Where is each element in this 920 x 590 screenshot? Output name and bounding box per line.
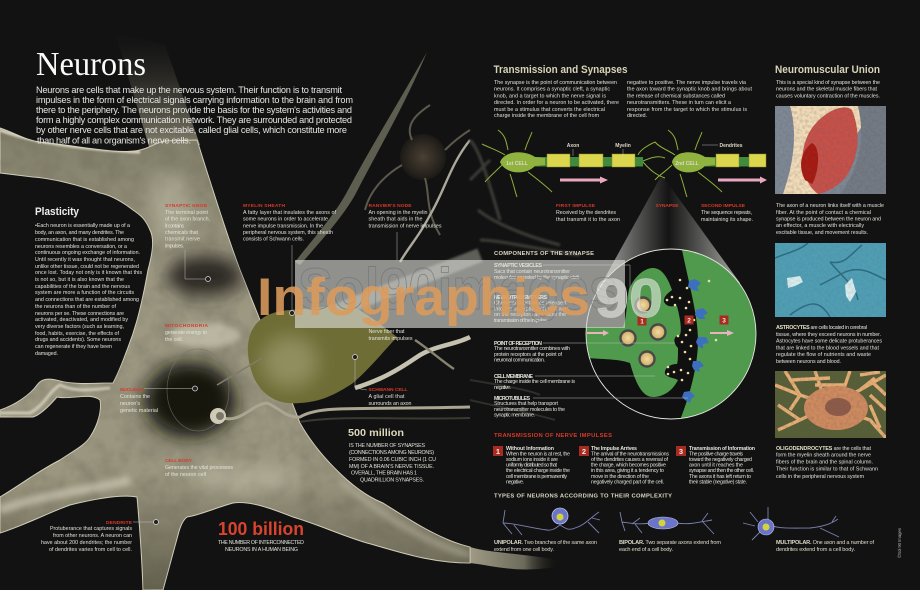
watermark: Sol90images xyxy=(298,257,618,322)
label: synaptic knob: The terminal point xyxy=(165,210,209,216)
label: Ranvier's node: An opening in the myelin xyxy=(368,210,428,216)
step 1: uniformly distributed so that xyxy=(506,462,558,468)
stat: 100 billion xyxy=(218,519,304,553)
text: Plasticity: Until recently it was thought that neurons, xyxy=(35,257,135,263)
label: synaptic knob: chemicals that xyxy=(165,230,199,236)
label: mitochondria: MITOCHONDRIA xyxy=(165,323,208,329)
diagram: two connected cells: 1st CELL xyxy=(506,161,528,167)
text: Plasticity: damaged. xyxy=(35,351,58,357)
label: components text: SYNAPTIC VESICLES xyxy=(494,263,542,269)
captions: neuron types: each end of a cell body. xyxy=(619,547,673,553)
captions: neuron types: MULTIPOLAR. One axon and a number of xyxy=(776,540,874,546)
label: myelin sheath: some neurons in order to accelerate xyxy=(243,217,328,223)
text: transmission intro: knob, and a target to which the nerve signal is xyxy=(494,94,606,100)
text: Plasticity: Plasticity xyxy=(35,206,80,218)
label: cell body xyxy=(165,458,233,478)
text: Plasticity: the neurons than of the number of xyxy=(35,304,117,310)
label: components text: on the receptors and allow the xyxy=(494,312,566,318)
label: myelin sheath: peripheral nervous system, this sheath xyxy=(243,230,333,236)
text: Plasticity: can regenerate if they have been xyxy=(35,344,112,350)
text: transmission intro: must be a stimulus that converts the electrical xyxy=(494,107,605,113)
icon: unipolar neuron xyxy=(503,508,600,535)
text: transmission intro: directed. In order for a neuron to be activated, there xyxy=(494,100,619,106)
text: Plasticity: •Each neuron is essentially made up of a xyxy=(35,223,130,229)
text: astrocytes: between neurons and blood. xyxy=(776,359,841,365)
text: transmission intro: the axon toward the synaptic knob and brings about xyxy=(627,87,753,93)
label: first impulse: FIRST IMPULSE xyxy=(556,203,596,209)
step 3: their stable (negative) state. xyxy=(689,480,747,486)
post-synaptic cell xyxy=(680,250,756,418)
label: synaptic knob: transmit nerve xyxy=(165,237,200,243)
label: first impulse: Received by the dendrites xyxy=(556,210,616,216)
label: components text: The neurotransmitter combines with xyxy=(494,346,570,352)
text: Plasticity: and connections that are established among xyxy=(35,297,139,303)
text: transmission intro: negative to positive. The nerve impulse travels via xyxy=(627,80,746,86)
receptors xyxy=(682,279,709,403)
label: mitochondria xyxy=(165,323,208,343)
text: transmission intro: response from the target to which the stimulus is xyxy=(627,107,747,113)
label: second impulse xyxy=(701,203,753,223)
intro text: form a highly complex communication network. They are surrounded and protected xyxy=(36,115,352,125)
icon: bipolar neuron xyxy=(620,512,714,534)
label: synaptic knob xyxy=(165,203,210,282)
credit: ©Sol 90 Images xyxy=(896,527,902,558)
step 1: Without Information xyxy=(506,446,554,452)
label: Ranvier's node xyxy=(368,203,442,260)
label: synaptic knob: it contains xyxy=(165,224,184,230)
synaptic knob xyxy=(580,268,681,397)
label: second impulse: maintaining its shape. xyxy=(701,217,753,223)
label: synaptic knob: impulses. xyxy=(165,244,184,250)
label: myelin sheath: MYELIN SHEATH xyxy=(243,203,285,209)
label: myelin sheath xyxy=(243,203,337,316)
step 2: 2 xyxy=(582,447,586,456)
step 1: 1 xyxy=(496,447,500,456)
text: transmission intro: neurotransmitters. These in turn can elicit a xyxy=(627,100,731,106)
text: transmission intro: directed. xyxy=(627,113,647,119)
stat: 500 million: FORMED IN 0.06 CUBIC INCH (1 CU xyxy=(349,457,436,463)
watermark: 90 xyxy=(595,267,663,329)
label: myelin sheath: consists of Schwann cells. xyxy=(243,237,304,243)
heading: neuromuscular union: Neuromuscular Union xyxy=(775,64,880,76)
text: astrocytes: regulate the flow of nutrients and waste xyxy=(776,352,871,358)
step 3: The positive charge travels xyxy=(689,452,743,458)
step 1: cell membrane is permanently xyxy=(506,474,567,480)
label: cell body: CELL BODY xyxy=(165,458,193,464)
label: myelin sheath: A fatty layer that insulates the axons of xyxy=(243,210,337,216)
label: Schwann cell: SCHWANN CELL xyxy=(368,387,408,393)
text: astrocytes: ASTROCYTES are cells located in cerebral xyxy=(776,325,867,331)
label: cell body: of the neuron cell xyxy=(165,472,206,478)
diagram: two connected cells: Axon xyxy=(567,143,579,149)
text: oligodendrocytes: cells in the peripheral nervous system xyxy=(776,474,865,480)
text: Plasticity: neurons resembles a conversation, or a xyxy=(35,244,127,250)
label: Ranvier's node: RANVIER'S NODE xyxy=(368,203,412,209)
text: Plasticity: activated, deactivated, and modified by xyxy=(35,317,128,323)
text: Plasticity: is not so, but it is also known that the xyxy=(35,277,124,283)
stat: 100 billion: NEURONS IN A HUMAN BEING xyxy=(225,547,298,553)
step 2: of the dendrites causes a reversal of xyxy=(591,457,669,463)
text: neuron and muscle: synapse is produced between the neuron and xyxy=(776,216,881,222)
intro text xyxy=(36,85,353,146)
flow arrows xyxy=(587,330,609,336)
text: neuromuscular intro xyxy=(776,80,880,100)
text: Plasticity: body, an axon, and many dendrites. The xyxy=(35,230,124,236)
step 3: 3 xyxy=(679,447,683,456)
label: axon xyxy=(368,329,413,342)
step 2: in this area, giving it a tendency to xyxy=(591,468,664,474)
stat: 100 billion: THE NUMBER OF INTERCONNECTED xyxy=(218,540,304,546)
text: Plasticity: drugs and accidents). Some neurons xyxy=(35,337,121,343)
diagram: two connected cells: Myelin xyxy=(615,143,631,149)
neurotransmitter dots xyxy=(666,279,717,381)
label: axon: Nerve fiber that xyxy=(368,329,405,335)
text: oligodendrocytes: Their function is similar to that of Schwann xyxy=(776,466,878,472)
heading: components of the synapse: COMPONENTS OF THE SYNAPSE xyxy=(494,251,594,257)
label: dendrite: have about 200 dendrites; the number xyxy=(41,540,132,546)
label: myelin sheath: nerve impulse transmission. In the xyxy=(243,224,323,230)
text: transmission intro xyxy=(494,80,753,119)
step 2: negatively charged part of the cell. xyxy=(591,480,664,486)
text: transmission intro: charge inside the membrane of the cell from xyxy=(494,113,600,119)
label: dendrite: DENDRITE xyxy=(106,520,133,526)
text: neuromuscular intro: This is a special kind of synapse between the xyxy=(776,80,880,86)
text: neuron and muscle: fiber. At the point of contact a chemical xyxy=(776,210,871,216)
intro text: impulses in the form of electrical signals carrying information to the brain and from xyxy=(36,95,353,105)
diagram: two connected cells: Dendrites xyxy=(719,143,743,149)
step 1: the electrical charge inside the xyxy=(506,468,570,474)
text: Plasticity: neurons per se. These connections are xyxy=(35,311,124,317)
number badges: 2 xyxy=(687,317,691,324)
text: neuron and muscle: an effector, a muscle with electrically xyxy=(776,223,864,229)
stat: 500 million: MM) OF A BRAIN'S NERVE TISSUE. xyxy=(349,464,434,470)
text: neuromuscular intro: causes voluntary contraction of the muscles. xyxy=(776,94,880,100)
label: dendrite: of dendrites varies from cell to cell. xyxy=(49,547,132,553)
label: cell body: Generates the vital processes xyxy=(165,465,233,471)
captions: neuron types: BIPOLAR. Two separate axons extend from xyxy=(619,540,721,546)
label: components text: molecules secreted by the synaptic cleft xyxy=(494,275,580,281)
step 2: move in the direction of the xyxy=(591,474,649,480)
label: first impulse xyxy=(556,203,620,223)
step 2: The arrival of the neurotransmissions xyxy=(591,452,669,458)
label: nucleus: genetic material xyxy=(120,408,158,414)
photo: oligodendrocytes xyxy=(775,371,886,438)
illustration: olive Schwann cell xyxy=(248,305,397,403)
illustration: axon fibres xyxy=(210,337,470,424)
label: Ranvier's node: sheath that aids in the xyxy=(368,217,423,223)
step 3: Transmission of Information xyxy=(689,446,755,452)
stat: 100 billion: 100 billion xyxy=(218,519,304,539)
label: components text: neurotransmitter molecules to the xyxy=(494,407,565,413)
illustration: background neuron and fibres xyxy=(295,52,580,420)
step 1: When the neuron is at rest, the xyxy=(506,452,570,458)
step 2: the charge, which becomes positive xyxy=(591,462,666,468)
label: nucleus: NUCLEUS xyxy=(120,387,144,393)
text: transmission intro: neurons. It comprises a synaptic cleft, a synaptic xyxy=(494,87,610,93)
text: Plasticity: very diverse factors (such as learning, xyxy=(35,324,124,330)
step 2: The Impulse Arrives xyxy=(591,446,637,452)
text: oligodendrocytes: fibers of the brain and the spinal column. xyxy=(776,460,873,466)
nucleus outline xyxy=(167,349,229,431)
label: components text: negative. xyxy=(494,385,511,391)
text: transmission intro: The synapse is the point of communication between xyxy=(494,80,617,86)
number badges xyxy=(638,316,728,326)
label: Schwann cell: surrounds an axon xyxy=(368,401,412,407)
label: components text: NEUROTRANSMITTERS xyxy=(494,295,547,301)
title: Neurons xyxy=(36,46,146,83)
diagram: two connected cells xyxy=(482,130,767,334)
label: components text: synaptic membrane. xyxy=(494,412,535,418)
text: astrocytes xyxy=(776,325,882,365)
icon: multipolar neuron xyxy=(743,507,839,540)
text: oligodendrocytes xyxy=(776,446,878,480)
label: dendrite: Protuberance that captures signals xyxy=(50,526,132,532)
label: nucleus: Contains the xyxy=(120,394,150,400)
label: Schwann cell: A glial cell that xyxy=(368,394,405,400)
text: transmission intro: the release of chemical substances called xyxy=(627,94,725,100)
intro text: there to the periphery. The neurons provide the basis for the system's activities and xyxy=(36,105,352,115)
heading: transmission and synapses: Transmission and Synapses xyxy=(494,64,628,76)
intro text: by other nerve cells that are not excitable, called glial cells, which constitute more xyxy=(36,125,347,135)
label: mitochondria: the cell. xyxy=(165,337,183,343)
label: components text: Chemical substances released xyxy=(494,300,566,306)
text: Plasticity: once lost. Today not only is it known that this xyxy=(35,270,142,276)
text: astrocytes: that are linked to the blood vessels and that xyxy=(776,346,880,352)
captions: neuron types xyxy=(494,540,874,553)
text: neuron and muscle: excitable tissue, and movement results. xyxy=(776,230,868,236)
stat: 500 million: 500 million xyxy=(348,428,404,439)
label: mitochondria: generate energy to xyxy=(165,330,207,336)
text: neuron and muscle xyxy=(776,203,884,236)
label: components text: transmission of the impulse. xyxy=(494,318,548,324)
heading: transmission of nerve impulses: TRANSMISSION OF NERVE IMPULSES xyxy=(494,433,612,439)
step 2 xyxy=(579,446,669,486)
label: synapse: SYNAPSE xyxy=(656,203,679,209)
diagram: two connected cells: 2nd CELL xyxy=(675,161,699,167)
diagram: synapse close-up xyxy=(586,248,756,420)
label: axon: transmits impulses xyxy=(368,336,413,342)
photo: neuromuscular junction xyxy=(775,106,886,194)
label: components text: Structures that help transport xyxy=(494,401,559,407)
label: Ranvier's node: transmission of nerve impulses xyxy=(368,224,442,230)
step 3: synapse and then the other cell. xyxy=(689,468,754,474)
text: Plasticity: communication that is established among xyxy=(35,237,134,243)
intro text: Neurons are cells that make up the nervous system. Their function is to transmit xyxy=(36,85,342,95)
label: nucleus: neuron's xyxy=(120,401,140,407)
text: Plasticity: continuous ongoing exchange of information. xyxy=(35,250,140,256)
label: second impulse: The sequence repeats, xyxy=(701,210,752,216)
step 1 xyxy=(493,446,570,486)
label: dendrite xyxy=(41,520,158,553)
stat: 500 million xyxy=(348,428,436,484)
text: neuron and muscle: The axon of a neuron links itself with a muscle xyxy=(776,203,884,209)
text: astrocytes: tissue, where they exceed neurons in number. xyxy=(776,332,881,338)
step 1: sodium ions inside it are xyxy=(506,457,558,463)
text: Plasticity: system are more a function of the circuits xyxy=(35,290,134,296)
label: components text: MICROTUBULES xyxy=(494,396,530,402)
step 1: negative. xyxy=(506,480,524,486)
text: oligodendrocytes: OLIGODENDROCYTES are the cells that xyxy=(776,446,872,452)
captions: neuron types: extend from one cell body. xyxy=(494,547,554,553)
label: synaptic knob: of the axon branch, xyxy=(165,217,210,223)
intro text: than half of all an organism's nerve cells. xyxy=(37,136,191,146)
label: components text: POINT OF RECEPTION xyxy=(494,341,542,347)
number badges: 3 xyxy=(722,317,726,324)
text: Plasticity xyxy=(35,206,142,357)
text: astrocytes: Astrocytes have some delicate protuberances xyxy=(776,338,882,344)
step 3: toward the negatively charged xyxy=(689,457,752,463)
cone of magnification xyxy=(597,178,740,334)
captions: neuron types: dendrites extend from a cell body. xyxy=(776,547,855,553)
label: nucleus xyxy=(120,386,198,414)
label: second impulse: SECOND IMPULSE xyxy=(701,203,746,209)
text: Plasticity: capabilities of the brain and the nervous xyxy=(35,284,130,290)
label: first impulse: that transmit it to the axon xyxy=(556,217,620,223)
label: Schwann cell xyxy=(352,354,412,407)
text: Plasticity: unlike other tissue, could not be regenerated xyxy=(35,264,139,270)
label: components text xyxy=(494,263,688,418)
watermark: Infographics xyxy=(257,268,590,327)
step 3: The axons it has left return to xyxy=(689,474,751,480)
label: synaptic knob: SYNAPTIC KNOB xyxy=(165,203,207,209)
stat: 500 million: IS THE NUMBER OF SYNAPSES xyxy=(349,443,425,449)
text: oligodendrocytes: form the myelin sheath around the nerve xyxy=(776,453,871,459)
label: components text: into the synaptic cleft that act xyxy=(494,306,567,312)
vesicles xyxy=(620,298,666,366)
text: Plasticity: food, habits, exercise, the effects of xyxy=(35,331,120,337)
label: components text: CELL MEMBRANE xyxy=(494,374,533,380)
stat: 500 million: OVERALL, THE BRAIN HAS 1 xyxy=(351,470,417,476)
illustration: large neuron xyxy=(0,32,560,590)
heading: types of neurons: TYPES OF NEURONS ACCORDING TO THEIR COMPLEXITY xyxy=(494,494,672,500)
stat: 500 million: (CONNECTIONS AMONG NEURONS) xyxy=(349,450,434,456)
label: components text: Sacs that contain neurotransmitter xyxy=(494,269,570,275)
label: components text: protein receptors at the point of xyxy=(494,352,563,358)
label: components text: The charge inside the cell membrane is xyxy=(494,379,575,385)
step 3: axon until it reaches the xyxy=(689,462,743,468)
label: components text: neuronal communication. xyxy=(494,358,545,364)
label: dendrite: from other neurons. A neuron can xyxy=(53,533,132,539)
stat: 500 million: QUADRILLION SYNAPSES. xyxy=(360,478,424,484)
number badges: 1 xyxy=(640,318,644,325)
step 3 xyxy=(676,446,755,486)
photo: astrocytes xyxy=(775,243,886,317)
text: neuromuscular intro: neurons and the skeletal muscle fibers that xyxy=(776,87,878,93)
captions: neuron types: UNIPOLAR. Two branches of the same axon xyxy=(494,540,597,546)
